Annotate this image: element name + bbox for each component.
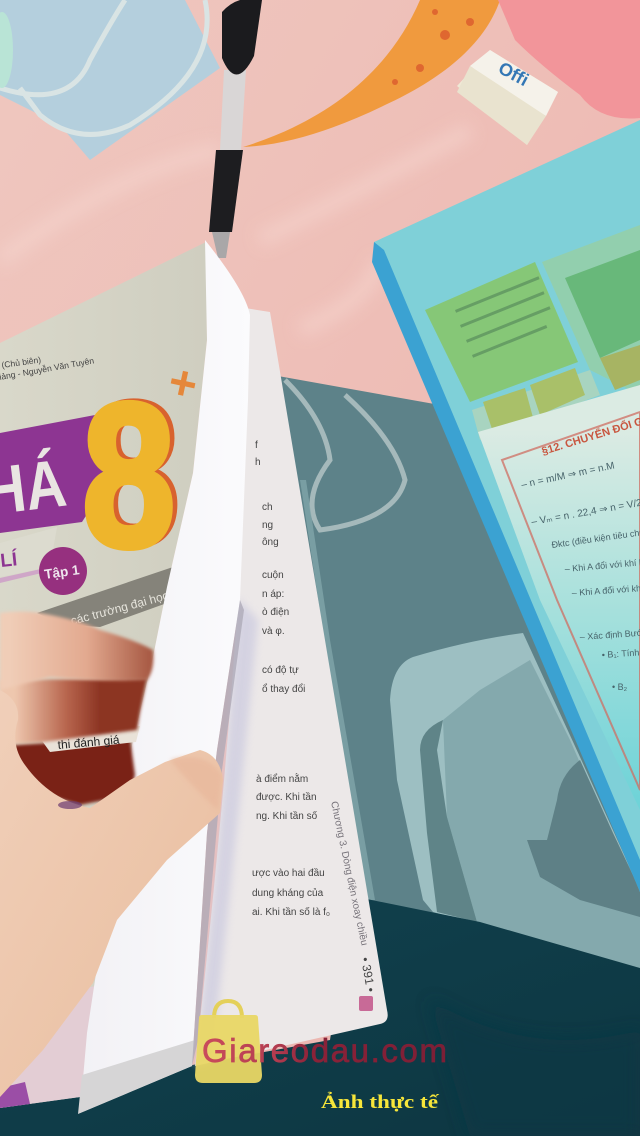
book cover: các trường đại học, cao xyxy=(69,582,195,628)
grey strip xyxy=(37,567,173,627)
pen xyxy=(209,0,262,258)
inner page: ược vào hai đầu xyxy=(252,867,325,879)
inner page: dung kháng của xyxy=(252,887,324,899)
inner page: ng. Khi tần số xyxy=(256,810,318,822)
dark teal cloth xyxy=(0,896,640,1136)
pink towel xyxy=(498,0,640,119)
hand xyxy=(0,612,223,1097)
folder reference sheet: • B₁: Tính xyxy=(601,647,640,660)
inner page: có độ tự xyxy=(262,665,299,676)
plastic folder with chart xyxy=(372,120,640,892)
inner page: Chương 3. Dòng điện xoay chiều xyxy=(328,800,370,947)
grey-teal patterned cloth xyxy=(278,376,640,975)
inner page: ai. Khi tần số là f₀ xyxy=(252,906,330,918)
inner page xyxy=(195,308,388,1066)
finger gap with cover text: thi đánh giá xyxy=(57,733,120,752)
finger gap with cover text xyxy=(40,726,140,752)
book cover: Tập 1 xyxy=(43,562,81,582)
caption: Ảnh thực tế xyxy=(321,1092,440,1113)
inner page: ch xyxy=(262,502,273,513)
eraser: Offi xyxy=(495,58,532,90)
inner page: và φ. xyxy=(262,626,285,637)
book cover: (Chủ biên) xyxy=(1,355,42,370)
inner page: ổ thay đổi xyxy=(262,683,305,695)
thick page block xyxy=(78,240,250,1114)
inner page: h xyxy=(255,457,261,468)
book cover: iảng - Nguyễn Văn Tuyên xyxy=(0,355,95,382)
inner page: f xyxy=(255,440,258,451)
eraser xyxy=(457,50,558,145)
watermark text: Giareodau.com xyxy=(202,1032,447,1069)
book cover xyxy=(0,242,207,1108)
volume badge xyxy=(39,547,87,595)
inner page: ò điện xyxy=(262,607,289,618)
inner page: n áp: xyxy=(262,589,284,600)
large 8 with shadow: 8 xyxy=(87,358,180,588)
finger one xyxy=(0,612,153,690)
folder reference sheet xyxy=(478,385,640,810)
plus sign: + xyxy=(164,355,202,413)
inner page: ng xyxy=(262,520,273,531)
book cover: 8 xyxy=(82,360,175,590)
finger two xyxy=(0,678,147,745)
palm and thumb xyxy=(0,690,223,1097)
watermark: shopping bag icon xyxy=(195,1001,262,1083)
inner page: • 391 • xyxy=(358,956,378,993)
sheet folds xyxy=(0,130,470,330)
inner page: cuộn xyxy=(262,570,284,581)
folder reference sheet: • B₂ xyxy=(612,682,628,692)
inner page: được. Khi tần xyxy=(256,791,317,803)
folder reference sheet: – n = m/M ⇒ m = n.M xyxy=(520,460,616,491)
inner page: à điểm nằm xyxy=(256,772,308,785)
pale blue note paper and cable xyxy=(0,0,220,160)
inner page: ông xyxy=(262,537,279,548)
orange fabric pattern xyxy=(243,0,500,147)
purple title banner xyxy=(0,415,115,533)
finger three xyxy=(10,738,135,805)
